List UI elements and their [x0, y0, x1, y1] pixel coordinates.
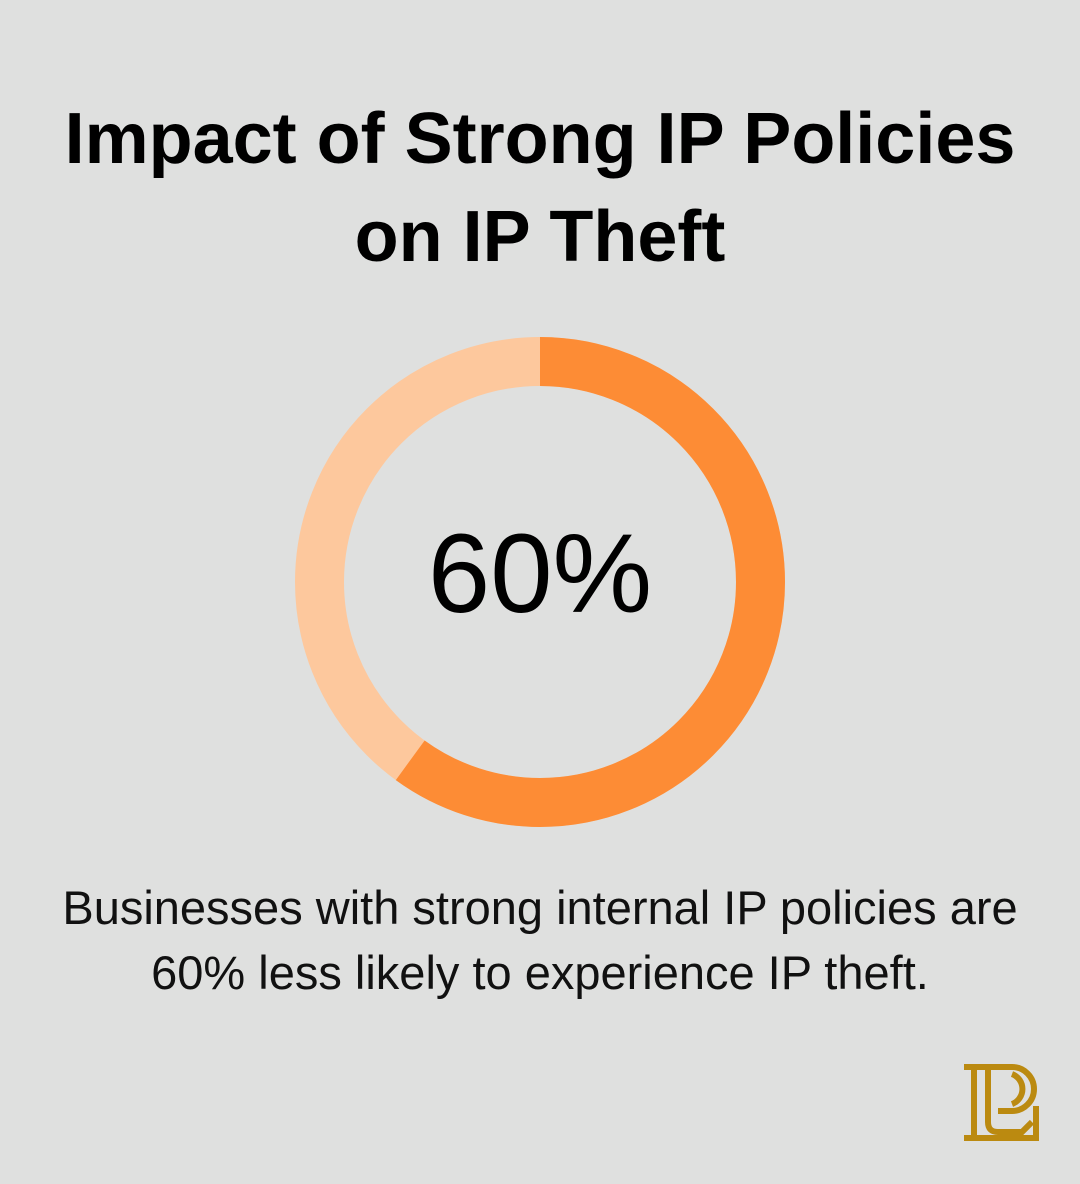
- title: [65, 99, 1015, 277]
- description text: 60% less likely to experience IP theft.: [151, 946, 929, 999]
- center percentage: 60%: [428, 511, 652, 636]
- description text: [62, 881, 1018, 999]
- description text: Businesses with strong internal IP policies are: [62, 881, 1018, 934]
- title: on IP Theft: [355, 197, 725, 277]
- title: Impact of Strong IP Policies: [65, 99, 1015, 179]
- icon: logo: [964, 1064, 1039, 1141]
